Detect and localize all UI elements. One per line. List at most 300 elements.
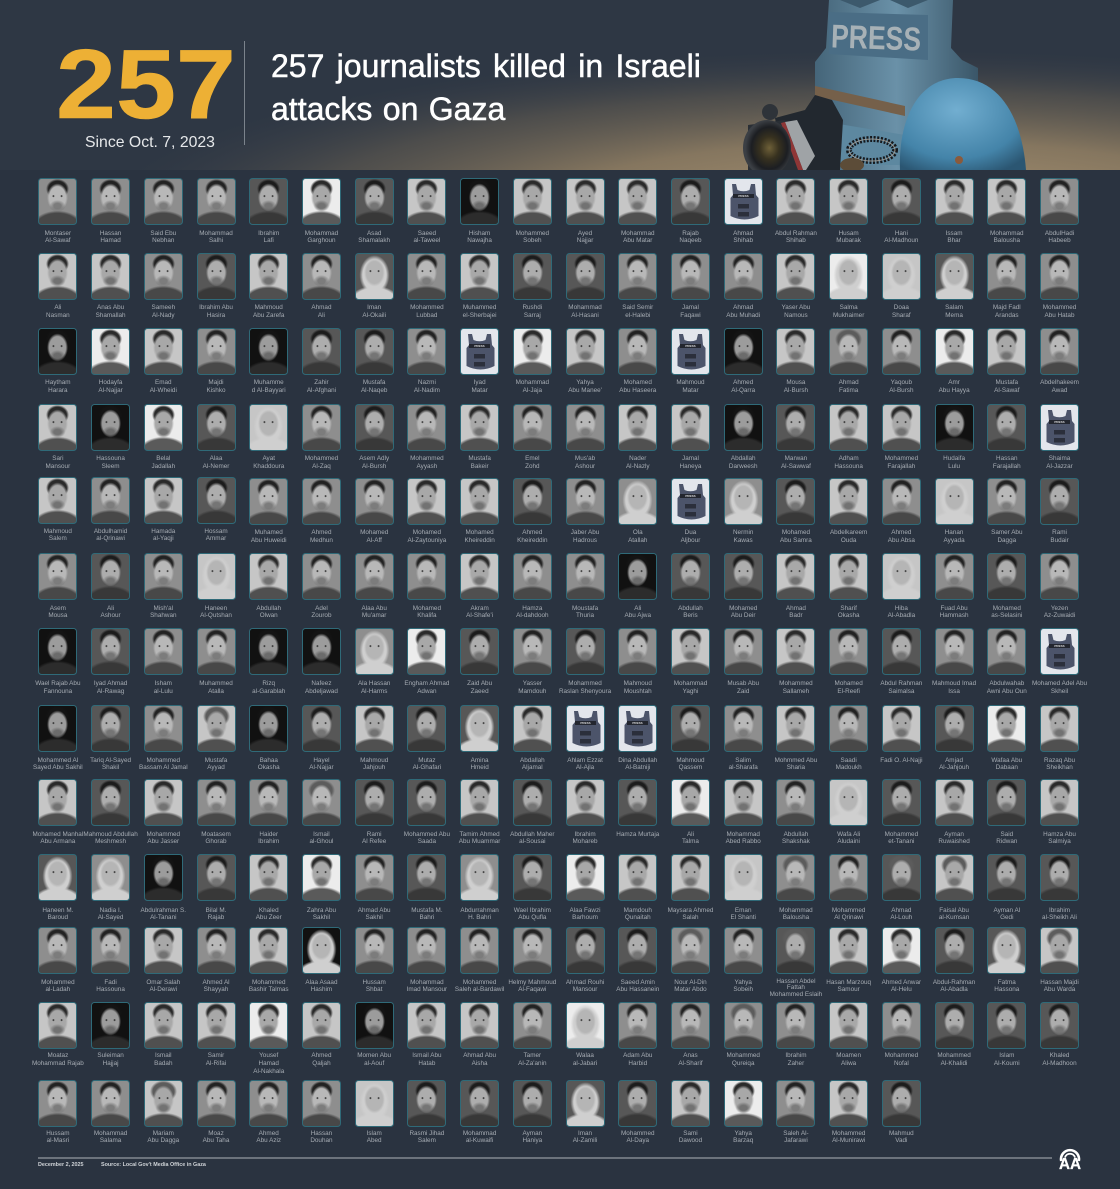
portrait: Ayman Al Gedi — [980, 854, 1033, 922]
portrait: Jaber Abu Hadrous — [559, 478, 611, 545]
portrait: Mariam Abu Dagga — [137, 1080, 190, 1146]
portrait: Mohammed Al Sayed Abu Sakhil: Mohammed Al — [38, 757, 78, 764]
portrait: Ahmad Abu Muhadi — [724, 253, 763, 319]
row 12 of portraits — [32, 1002, 1092, 1068]
portrait: Hasan Marzouq Samour — [822, 927, 875, 995]
portrait: Anas Abu Shamallah: Shamallah — [96, 312, 126, 319]
portrait: Tamer Al-Za'anin: Tamer — [524, 1052, 541, 1059]
portrait: Alaa Asaad Hashim: Hashim — [311, 986, 332, 993]
portrait: Ola Atallah: Atallah — [628, 537, 647, 544]
portrait: Marwan Al-Sawwaf: Al-Sawwaf — [781, 463, 811, 470]
portrait: Ibrahim Zaher: Zaher — [788, 1060, 804, 1067]
portrait: Akram Al-Shafe'i: Akram — [470, 605, 489, 612]
portrait: Doaa Sharaf: Sharaf — [892, 312, 911, 319]
portrait: Alaa Fawzi Barhoum: Barhoum — [572, 914, 598, 921]
portrait: Hani Al-Madhoun: Al-Madhoun — [884, 237, 918, 244]
portrait: Mohammed Al-Khalidi: Mohammed — [937, 1052, 971, 1059]
portrait: Ahmed Qaljah: Ahmed — [311, 1052, 332, 1059]
portrait: Hamada al-Yaqji: Hamada — [151, 528, 175, 534]
portrait: Asem Adly Al-Bursh: Al-Bursh — [362, 463, 386, 470]
portrait: Hanan Ayyada — [928, 478, 980, 545]
portrait: Mohamed Al-Zaytouniya: Al-Zaytouniya — [407, 537, 446, 544]
portrait: Rajab Naqeeb: Rajab — [682, 230, 699, 236]
title: attacks on Gaza — [271, 91, 505, 127]
portrait: Mohammed Bashir Talmas: Bashir Talmas — [249, 986, 289, 993]
portrait: Ahlam Ezzat Al-Ajla: Ahlam Ezzat — [567, 757, 603, 764]
header illustration: press vest, helmet and camera on sand: PRESS — [830, 17, 922, 58]
portrait: Emel Zohd: Zohd — [525, 463, 540, 470]
portrait: Moaz Abu Taha: Abu Taha — [203, 1137, 229, 1144]
portrait: Hossam Ammar: Hossam — [204, 528, 228, 534]
portrait: Mahmoud Abdullah Meshmesh: Mahmoud Abdullah — [83, 831, 138, 838]
portrait: Hisham Nawajha — [460, 178, 499, 244]
portrait: Rasmi Jihad Salem: Rasmi Jihad — [409, 1130, 444, 1137]
portrait: Ahmed Qaljah — [295, 1002, 348, 1068]
portrait: Hussam al-Masri — [32, 1080, 84, 1146]
portrait: Ahmed Abu Absa — [875, 478, 928, 545]
portrait: Ahmad Fatima: Fatima — [839, 386, 858, 394]
portrait: Alaa Al-Nemer — [190, 404, 242, 471]
portrait: Mohamed El-Reefi — [822, 628, 875, 696]
portrait: Mahmoud Abu Zarefa: Mahmoud — [255, 304, 283, 311]
portrait: Marwan Al-Sawwaf — [770, 404, 822, 471]
portrait: Majdi Kishko — [190, 328, 242, 395]
portrait: Mohamed Manhal Abu Armana: Abu Armana — [40, 838, 75, 845]
portrait: Fadi O. Al-Najji — [875, 705, 928, 773]
portrait: Momen Abu al-Aouf: Momen Abu — [357, 1052, 391, 1059]
portrait: Yousef Hamad Al-Nakhala: Hamad — [258, 1060, 279, 1067]
portrait: Asem Mousa: Asem — [50, 605, 66, 612]
portrait: Abdallah Darweesh — [717, 404, 770, 471]
portrait: Sameeh Al-Nady: Al-Nady — [152, 312, 175, 319]
portrait: Ahmad Rouhi Mansour: Ahmad Rouhi — [566, 979, 604, 986]
portrait: Mohammad Balousha: Balousha — [783, 914, 809, 921]
portrait: Mustafa Bakeir — [453, 404, 506, 471]
portrait: Yaqoub Al-Bursh: Yaqoub — [891, 379, 912, 386]
portrait: Engham Ahmad Adwan: Engham Ahmad — [404, 680, 449, 687]
portrait: Maysara Ahmed Salah: Maysara Ahmed — [668, 906, 713, 914]
portrait: Mus'ab Ashour — [559, 404, 611, 471]
portrait: Nafeez Abdeljawad: Nafeez — [311, 680, 332, 687]
portrait: Anas Abu Shamallah: Anas Abu — [97, 304, 124, 311]
portrait: Abdulhamid al-Qrinawi — [84, 476, 137, 544]
portrait: Mohamed Al-Aff: Mohamed — [360, 529, 388, 536]
portrait: Jamal Faqawi — [671, 253, 710, 319]
portrait: Asem Mousa — [32, 553, 84, 621]
portrait: Ayman Al Gedi: Ayman Al — [993, 906, 1020, 914]
portrait: Salma Mukhaimer: Mukhaimer — [833, 312, 864, 319]
row 1 of portraits — [38, 178, 1079, 244]
portrait: Anas Al-Sharif: Al-Sharif — [678, 1060, 703, 1067]
portrait: Mohammed Al-Khalidi: Al-Khalidi — [941, 1060, 967, 1067]
portrait: Mohammed al-Ladah: al-Ladah — [46, 986, 70, 993]
portrait: Muhammed Al-Bayyari: d Al-Bayyari — [252, 386, 286, 394]
portrait: Majd Fadl Arandas — [980, 253, 1033, 320]
portrait: Issam Bhar: Bhar — [947, 237, 961, 244]
portrait: Moamen Aliwa: Moamen — [836, 1052, 861, 1059]
portrait: Rizq al-Garablah: Rizq — [262, 680, 275, 687]
portrait: Anas Al-Sharif: Anas — [683, 1052, 698, 1059]
portrait: Khaled Abu Zeer: Abu Zeer — [256, 914, 282, 921]
portrait: Ahmad Al-Louh: Ahmad — [891, 906, 911, 914]
portrait: Asem Adly Al-Bursh — [348, 404, 401, 471]
portrait: Salim al-Sharafa: al-Sharafa — [729, 764, 758, 771]
portrait: Yahya Barzaq: Barzaq — [733, 1137, 753, 1144]
portrait: Nadia I. Al-Sayed: Nadia I. — [100, 906, 122, 914]
portrait: Alaa Al-Nemer: Al-Nemer — [203, 463, 229, 470]
portrait: Muhammed Al-Bayyari — [242, 328, 295, 395]
portrait: Ahmed Medhun — [295, 478, 348, 545]
portrait: Mahmoud Abu Zarefa: Abu Zarefa — [253, 312, 284, 319]
portrait: Muhamed Abu Huweidi — [242, 478, 295, 545]
portrait: Mohammad Balousha — [770, 854, 822, 922]
portrait: Rasmi Jihad Salem — [401, 1080, 453, 1146]
portrait: Haytham Harara: Haytham — [45, 379, 71, 386]
portrait: Hamza Abu Salmiya — [1033, 779, 1086, 847]
portrait: Mohammad Balousha: Mohammad — [779, 906, 813, 914]
portrait: Mohammed Sobeh: Mohammed — [516, 230, 549, 236]
portrait: Moatasem Ghorab — [190, 779, 242, 847]
portrait: Abdulrahman S. Al-Tanani — [137, 854, 190, 922]
portrait: Ali Ashour: Ashour — [101, 612, 121, 619]
row 6 of portraits — [32, 553, 1092, 621]
portrait: Hussam Shbat — [348, 927, 401, 995]
portrait: Bahaa Okasha — [242, 705, 295, 773]
portrait: Mohammed Abu Hatab: Mohammed — [1043, 304, 1076, 311]
portrait: Mohammed Sallameh — [770, 628, 822, 696]
portrait: Emad Al-Wheidi — [137, 328, 190, 395]
portrait: Samir Al-Rifai — [190, 1002, 242, 1068]
portrait: Ibrahim Mohareb — [559, 779, 611, 847]
row 13 of portraits — [32, 1080, 1092, 1146]
portrait: Abdul Rahman Saimalsa — [875, 628, 928, 696]
portrait: AbdulHadi Habeeb: AbdulHadi — [1045, 230, 1074, 236]
portrait: Mohammed Raslan Shenyoura: Raslan Shenyoura — [559, 688, 611, 695]
portrait: Mohammed Farajallah — [875, 404, 928, 471]
portrait: Mohamed Abu Haseera: Mohamed — [624, 379, 652, 386]
portrait: Ahmad Rouhi Mansour: Mansour — [573, 986, 597, 993]
portrait: Alaa Al-Nemer: Alaa — [210, 455, 222, 462]
portrait: Mohammed Al-Zaq: Mohammed — [305, 455, 338, 462]
portrait: Nafeez Abdeljawad — [295, 628, 348, 696]
portrait: Ibrahim Lafi: Lafi — [264, 237, 274, 244]
portrait: Rami Budair: Budair — [1050, 537, 1069, 544]
portrait: Alaa Fawzi Barhoum — [559, 854, 611, 922]
portrait: Amina Hmeid: Hmeid — [470, 764, 489, 771]
portrait: Husam Mubarak: Mubarak — [836, 237, 861, 244]
portrait: Ali Talma — [664, 779, 717, 847]
portrait: Fatma Hassona: Fatma — [998, 979, 1016, 986]
portrait: Hussam al-Masri: Hussam — [46, 1130, 69, 1137]
portrait: Wafa Ali Aludaini: Wafa Ali — [837, 831, 860, 838]
portrait: Mohamed El-Reefi: Mohamed — [835, 680, 863, 687]
portrait: Hamza Al-dahdooh — [506, 553, 559, 621]
portrait: Ibrahim al-Sheikh Ali: al-Sheikh Ali — [1042, 914, 1077, 921]
portrait: Ahmed Al Shayyah — [190, 927, 242, 995]
portrait: Belal Jadallah: Belal — [156, 455, 170, 462]
portrait: Mohamed Al-Zaytouniya: Mohamed — [413, 529, 441, 536]
portrait: Mohammad Imad Mansour: Mohammad — [410, 979, 444, 986]
portrait: Mustafa Bakeir: Mustafa — [468, 455, 491, 462]
portrait: Adel Zourob: Adel — [315, 605, 328, 612]
portrait: Mohammed Al-Daya: Al-Daya — [626, 1137, 649, 1144]
portrait: Ala Hassan Al-Harms: Ala Hassan — [358, 680, 390, 687]
portrait: Abdulwahab Awni Abu Oun — [980, 628, 1033, 696]
portrait: Omar Salah Al-Derawi — [137, 927, 190, 995]
portrait: Mohammad Yaghi: Yaghi — [683, 688, 698, 695]
portrait: Mohammed Ayyash: Mohammed — [410, 455, 444, 462]
portrait: Sari Mansour: Sari — [52, 455, 64, 462]
portrait: Said Semir el-Halebi: el-Halebi — [625, 312, 650, 319]
portrait: Ayat Khaddoura: Khaddoura — [253, 463, 284, 470]
portrait: Shaima Al-Jazzar: Shaima — [1049, 455, 1070, 462]
portrait: Haneen Al-Qutshan: Al-Qutshan — [200, 612, 232, 619]
portrait: Jamal Haneya: Jamal — [682, 455, 699, 462]
portrait: Muhamed Abu Huweidi: Muhamed — [255, 529, 283, 536]
portrait: Ahmed Abu Aziz: Ahmed — [259, 1130, 279, 1137]
portrait: Ahmed Kheireddin: Kheireddin — [517, 537, 548, 544]
portrait: Mahmoud Moushtah — [611, 628, 664, 696]
portrait: Ahmad Abu Sakhil: Ahmad Abu — [358, 906, 391, 914]
portrait: Nader Al-Nazly: Al-Nazly — [626, 463, 650, 470]
portrait: Mahmoud Salem: Mahmoud — [44, 528, 72, 534]
portrait: Mohamed El-Reefi: El-Reefi — [837, 688, 860, 695]
portrait: Ahmad Shihab — [724, 178, 763, 244]
portrait: Mahmoud Qassem: Qassem — [679, 764, 702, 771]
portrait: Yezen Az-Zuwaidi — [1033, 553, 1086, 621]
portrait: Saleh Al-Jafarawi: Saleh Al- — [783, 1130, 809, 1137]
portrait: Ali Talma: Talma — [682, 838, 699, 845]
portrait: Montaser Al-Sawaf: Al-Sawaf — [45, 237, 71, 244]
portrait: Nadia I. Al-Sayed: Al-Sayed — [98, 914, 123, 921]
portrait: Hassan Hamad: Hassan — [100, 230, 121, 236]
portrait: Nazmi Al-Nadim — [401, 328, 453, 395]
portrait: Sameeh Al-Nady: Sameeh — [151, 304, 175, 311]
portrait: Belal Jadallah — [137, 404, 190, 471]
portrait: Fadi Hassouna: Hassouna — [96, 986, 125, 993]
portrait: Zahir Al-Afghani: Zahir — [314, 379, 329, 386]
portrait: Ali Abu Ajwa: Abu Ajwa — [625, 612, 651, 619]
portrait: Mustafa M. Bahri: Bahri — [419, 914, 434, 921]
portrait: Abdulrahman S. Al-Tanani: Al-Tanani — [150, 914, 177, 921]
portrait: Ahmed Abu Aziz: Abu Aziz — [256, 1137, 281, 1144]
portrait: Mahmoud Salem — [32, 476, 84, 544]
portrait: Mohammed Lubbad: Mohammed — [410, 304, 444, 311]
footer date: December 2, 2025 — [38, 1162, 84, 1168]
portrait: Majd Fadl Arandas: Arandas — [995, 312, 1019, 319]
portrait: Razaq Abu Sheikhan: Sheikhan — [1046, 764, 1073, 771]
portrait: Moamen Aliwa — [822, 1002, 875, 1068]
portrait: Samer Abu Dagga — [980, 478, 1033, 545]
portrait: Hassan Abdel Fattah Mohammed Eslaih: Hassan Abdel — [776, 978, 816, 985]
portrait: Muhammed Al-Bayyari: Muhamme — [254, 379, 284, 386]
portrait: Mustafa Al-Sawaf: Al-Sawaf — [994, 386, 1019, 394]
portrait: Wael Rajab Abu Fannouna — [32, 628, 84, 696]
press patch — [829, 12, 928, 60]
portrait: Ahmad Al-Louh — [875, 854, 928, 922]
portrait: Abdullah Maher al-Sousai: Abdullah Maher — [510, 831, 555, 838]
portrait: Ayman Haniya — [506, 1080, 559, 1146]
portrait: Mohammed Qureiqa — [717, 1002, 770, 1068]
portrait: Anas Abu Shamallah — [91, 253, 130, 319]
portrait: Abdul Rahman Saimalsa: Saimalsa — [888, 688, 914, 695]
portrait: Mohammed Lubbad: Lubbad — [416, 312, 437, 319]
row 3 of portraits — [32, 328, 1092, 395]
portrait: Mohamed Abu Haseera — [611, 328, 664, 395]
portrait: Mish'al Shahwan: Shahwan — [150, 612, 177, 619]
portrait: Mohammad Abu Matar — [618, 178, 657, 244]
portrait: Nour Al-Din Matar Abdo — [664, 927, 717, 995]
portrait: Husam Mubarak: Husam — [839, 230, 859, 236]
portrait: Muhamed Abu Huweidi: Abu Huweidi — [251, 537, 287, 544]
portrait: Said Semir el-Halebi: Said Semir — [622, 304, 653, 311]
portrait: Ali Ashour: Ali — [107, 605, 114, 612]
portrait: Zaid Abu Zaeed — [453, 628, 506, 696]
portrait: Hassan Farajallah — [980, 404, 1033, 471]
row 7 of portraits — [32, 628, 1092, 696]
portrait: Hudaifa Lulu: Hudaifa — [943, 455, 965, 462]
portrait: Samer Abu Dagga: Samer Abu — [991, 529, 1022, 536]
portrait: Wael Ibrahim Abu Qufla: Wael Ibrahim — [514, 906, 551, 914]
portrait: Zahra Abu Sakhil — [295, 854, 348, 922]
portrait: Dina Abdullah Al-Batniji — [611, 705, 664, 773]
portrait: Asem Adly Al-Bursh: Asem Adly — [359, 455, 389, 462]
portrait: Abdallah Aljamal: Aljamal — [522, 764, 543, 771]
portrait: Mohammed et-Tanani: Mohammed — [885, 831, 918, 838]
portrait: Hani Al-Madhoun: Hani — [895, 230, 908, 236]
portrait: Jamal Haneya: Haneya — [680, 463, 701, 470]
portrait: Shaima Al-Jazzar: Al-Jazzar — [1046, 463, 1073, 470]
portrait: Moamen Aliwa: Aliwa — [841, 1060, 856, 1067]
portrait: Mohmmed Abu Sharia: Mohmmed Abu — [775, 757, 817, 764]
portrait: Amjad Al-Jahjouh — [928, 705, 980, 773]
portrait: Hassan Abdel Fattah Mohammed Eslaih: Fattah — [787, 984, 805, 991]
portrait: Wafaa Abu Dabaan — [980, 705, 1033, 773]
portrait: Hassouna Sleem: Hassouna — [96, 455, 125, 462]
portrait: Mohammed Al Sayed Abu Sakhil — [32, 705, 84, 773]
portrait: Hasan Marzouq Samour: Samour — [838, 986, 860, 993]
portrait: AbdulHadi Habeeb — [1040, 178, 1079, 244]
portrait: Mohammad Salhi: Mohammad — [199, 230, 233, 236]
portrait: Mohammed Nofal: Mohammed — [885, 1052, 918, 1059]
portrait: Razaq Abu Sheikhan — [1033, 705, 1086, 773]
camera — [775, 95, 843, 170]
portrait: Ismail al-Ghoul: al-Ghoul — [309, 838, 333, 845]
portrait: Ibrahim Zaher: Ibrahim — [785, 1052, 806, 1059]
portrait: Iman Al-Okaili: Iman — [367, 304, 381, 311]
portrait: Mohammed Saleh al-Bardawil — [453, 927, 506, 995]
portrait: Hodayfa Al-Najjar: Hodayfa — [99, 379, 122, 386]
portrait: Mohamed Al-Zaytouniya — [401, 478, 453, 545]
portrait: Abdulrahman S. Al-Tanani: Abdulrahman S. — [141, 906, 186, 914]
portrait: Yahya Abu Manee': Yahya — [576, 379, 594, 386]
portrait: Mohammed Qureiqa: Mohammed — [726, 1052, 760, 1059]
portrait: Moataz Mohammad Rajab: Mohammad Rajab — [32, 1060, 84, 1067]
portrait: Abdulwahab Awni Abu Oun: Awni Abu Oun — [987, 688, 1027, 695]
portrait: Fadi Hassouna: Fadi — [104, 979, 117, 986]
portrait: Jaber Abu Hadrous: Jaber Abu — [571, 529, 599, 536]
portrait: Hossam Ammar: Ammar — [206, 535, 226, 542]
portrait: Doaa Sharaf: Doaa — [894, 304, 909, 311]
portrait: Helmy Mahmoud Al-Faqawi: Helmy Mahmoud — [508, 979, 556, 986]
portrait: Tariq Al-Sayed Shakil — [84, 705, 137, 773]
portrait: Mutaz Al-Ghafari — [401, 705, 453, 773]
portrait: Ahmed Kheireddin: Ahmed — [522, 529, 542, 536]
portrait: Ismail Abu Hatab — [401, 1002, 453, 1068]
portrait: Alaa Asaad Hashim: Alaa Asaad — [305, 979, 338, 986]
portrait: Mahmoud Moushtah: Moushtah — [624, 688, 652, 695]
portrait: Mahmoud Qassem — [664, 705, 717, 773]
portrait: Abdelkareem Ouda — [822, 478, 875, 545]
portrait: Mohammed Bashir Talmas: Mohammed — [252, 979, 285, 986]
portrait: Hassouna Sleem: Sleem — [102, 463, 120, 470]
portrait: Mohamed Khalifa — [401, 553, 453, 621]
portrait: Hasan Marzouq Samour: Hasan Marzouq — [826, 979, 871, 986]
portrait: Ahlam Ezzat Al-Ajla — [559, 705, 611, 773]
portrait: Mohammed al-Ladah — [32, 927, 84, 995]
portrait: Abdul-Rahman Al-Abadla: Abdul-Rahman — [933, 979, 975, 986]
portrait: Abdullah Olwan — [242, 553, 295, 621]
portrait: Said Ridwan: Ridwan — [996, 838, 1017, 845]
portrait: Ahmed Al-Qarra: Al-Qarra — [731, 386, 755, 394]
row 8 of portraits — [32, 705, 1092, 773]
portrait: Dua Aljbour: Dua — [685, 529, 696, 536]
portrait: Mohammad Al-Jaja — [506, 328, 559, 395]
portrait: Nadia I. Al-Sayed — [84, 854, 137, 922]
portrait: Ali Nasman: Ali — [54, 304, 61, 311]
portrait: Haytham Harara — [32, 328, 84, 395]
portrait: Zaid Abu Zaeed: Zaeed — [471, 688, 489, 695]
portrait: Samir Al-Rifai: Samir — [208, 1052, 224, 1059]
portrait: Muhammed el-Sherbajei: Muhammed — [463, 304, 496, 311]
portrait: Abdelhakeem Awad — [1033, 328, 1086, 395]
portrait: Doaa Sharaf — [875, 253, 928, 320]
portrait: Hodayfa Al-Najjar: Al-Najjar — [98, 386, 123, 394]
portrait: Hamza Murtaja — [611, 779, 664, 847]
portrait: Abdullah Shakshak — [770, 779, 822, 847]
portrait: Wafa Ali Aludaini — [822, 779, 875, 847]
portrait: Khaled Abu Zeer: Khaled — [259, 906, 279, 914]
portrait: Hudaifa Lulu — [928, 404, 980, 471]
portrait: Saeed al-Taweel — [407, 178, 446, 244]
portrait: Abdelkareem Ouda: Ouda — [841, 537, 856, 544]
portrait: Nazmi Al-Nadim: Nazmi — [418, 379, 436, 386]
portrait: Mustafa Al-Naqeb — [348, 328, 401, 395]
portrait: Mohammed Abu Hatab: Abu Hatab — [1045, 312, 1074, 319]
portrait: Mohammed Bassam Al Jamal — [137, 705, 190, 773]
portrait: Majdi Kishko: Majdi — [208, 379, 224, 386]
portrait: Mustafa Ayyad: Ayyad — [207, 764, 225, 771]
portrait: Ola Atallah: Ola — [633, 529, 643, 536]
portrait: Zahir Al-Afghani: Al-Afghani — [307, 386, 336, 394]
portrait: Helmy Mahmoud Al-Faqawi: Al-Faqawi — [518, 986, 546, 993]
portrait: Mahmoud Salem: Salem — [49, 535, 67, 542]
portrait: Mohamed Abu Samra — [770, 478, 822, 545]
portrait: Ayman Ruwaished: Ayman — [944, 831, 964, 838]
portrait: Mohamed Adel Abu Skheil — [1033, 628, 1086, 696]
portrait: Adel Zourob: Zourob — [311, 612, 332, 619]
portrait: Mousa Al-Bursh: Al-Bursh — [784, 386, 808, 394]
portrait: Alaa Abu Mu'amar — [348, 553, 401, 621]
portrait: Tamim Ahmed Abu Muammar: Tamim Ahmed — [460, 831, 500, 838]
portrait: Sari Mansour: Mansour — [46, 463, 70, 470]
portrait: Walaa al-Jabari — [559, 1002, 611, 1068]
portrait: Mohammed Abu Jasser — [137, 779, 190, 847]
portrait: Mamdouh Qunaitah: Qunaitah — [625, 914, 651, 921]
portrait: Helmy Mahmoud Al-Faqawi — [506, 927, 559, 995]
portrait: Mohammed Al Sayed Abu Sakhil: Sayed Abu Sakhil — [33, 764, 83, 771]
portrait: Mohammad al-Kuwaifi — [453, 1080, 506, 1146]
